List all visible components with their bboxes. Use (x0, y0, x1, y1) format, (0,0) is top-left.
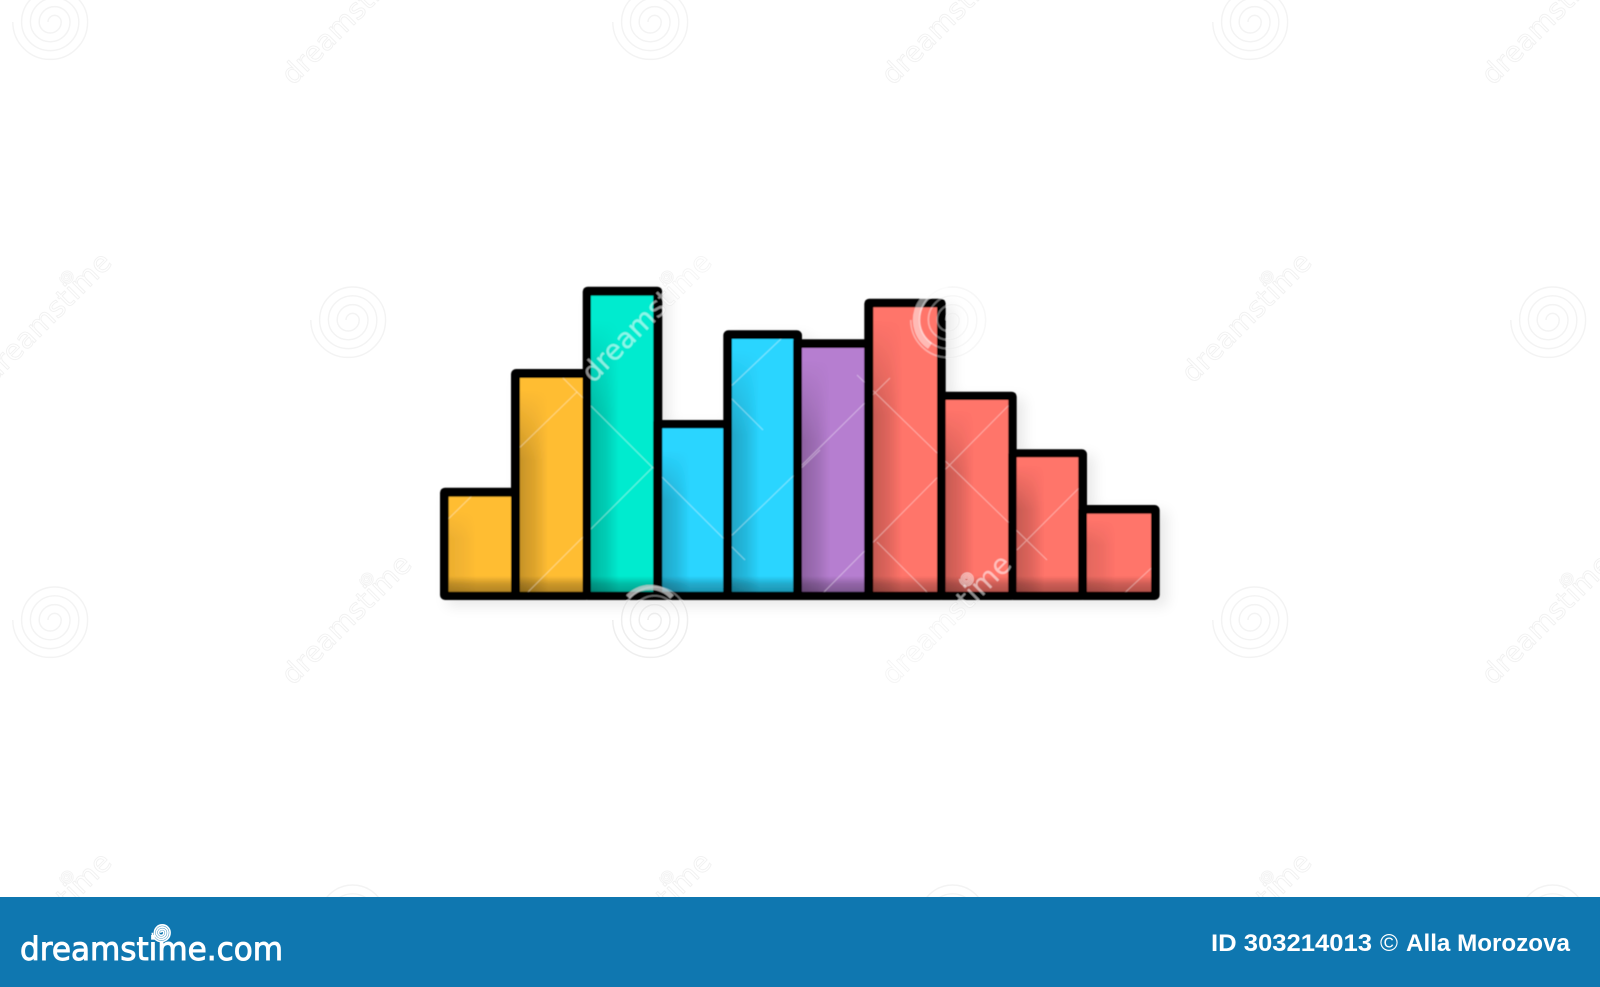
footer band (0, 897, 1600, 987)
bar 8: coral (937, 392, 1017, 600)
watermark overlay on chart: dreamstime (875, 547, 1018, 691)
bar 2: amber (511, 369, 591, 600)
bar 1: amber (440, 488, 520, 600)
watermark overlay on chart: dreamstime (575, 245, 718, 389)
bar 4: sky blue (653, 420, 732, 600)
logo: dreamstime.com: dreamstime.com (20, 930, 283, 968)
image id and credit: © (1380, 930, 1398, 957)
bar 10: coral (1078, 505, 1160, 600)
watermark pattern: dreamstime (575, 845, 718, 987)
bar chart (439, 286, 1160, 658)
watermark lines over bars (440, 337, 1160, 600)
bar 3: teal (583, 287, 662, 600)
image id and credit: ID 303214013 (1211, 930, 1372, 957)
bar shading (449, 320, 1151, 592)
watermark pattern: dreamstime (875, 547, 1018, 691)
watermark pattern: dreamstime (275, 547, 418, 691)
image id and credit: Alla Morozova (1406, 930, 1571, 957)
chart drop shadow (447, 293, 1167, 606)
watermark overlay on chart (575, 245, 1018, 691)
bar 5: sky blue (723, 330, 802, 600)
bar 6: purple (793, 339, 873, 600)
watermark pattern: dreamstime (575, 245, 718, 389)
watermark pattern: dreamstime (1175, 245, 1318, 389)
image id and credit (1211, 930, 1571, 957)
icon: logo spiral (152, 925, 170, 942)
watermark pattern: dreamstime (1175, 845, 1318, 987)
bar 7: coral (864, 299, 946, 600)
bar 9: coral (1008, 449, 1087, 600)
